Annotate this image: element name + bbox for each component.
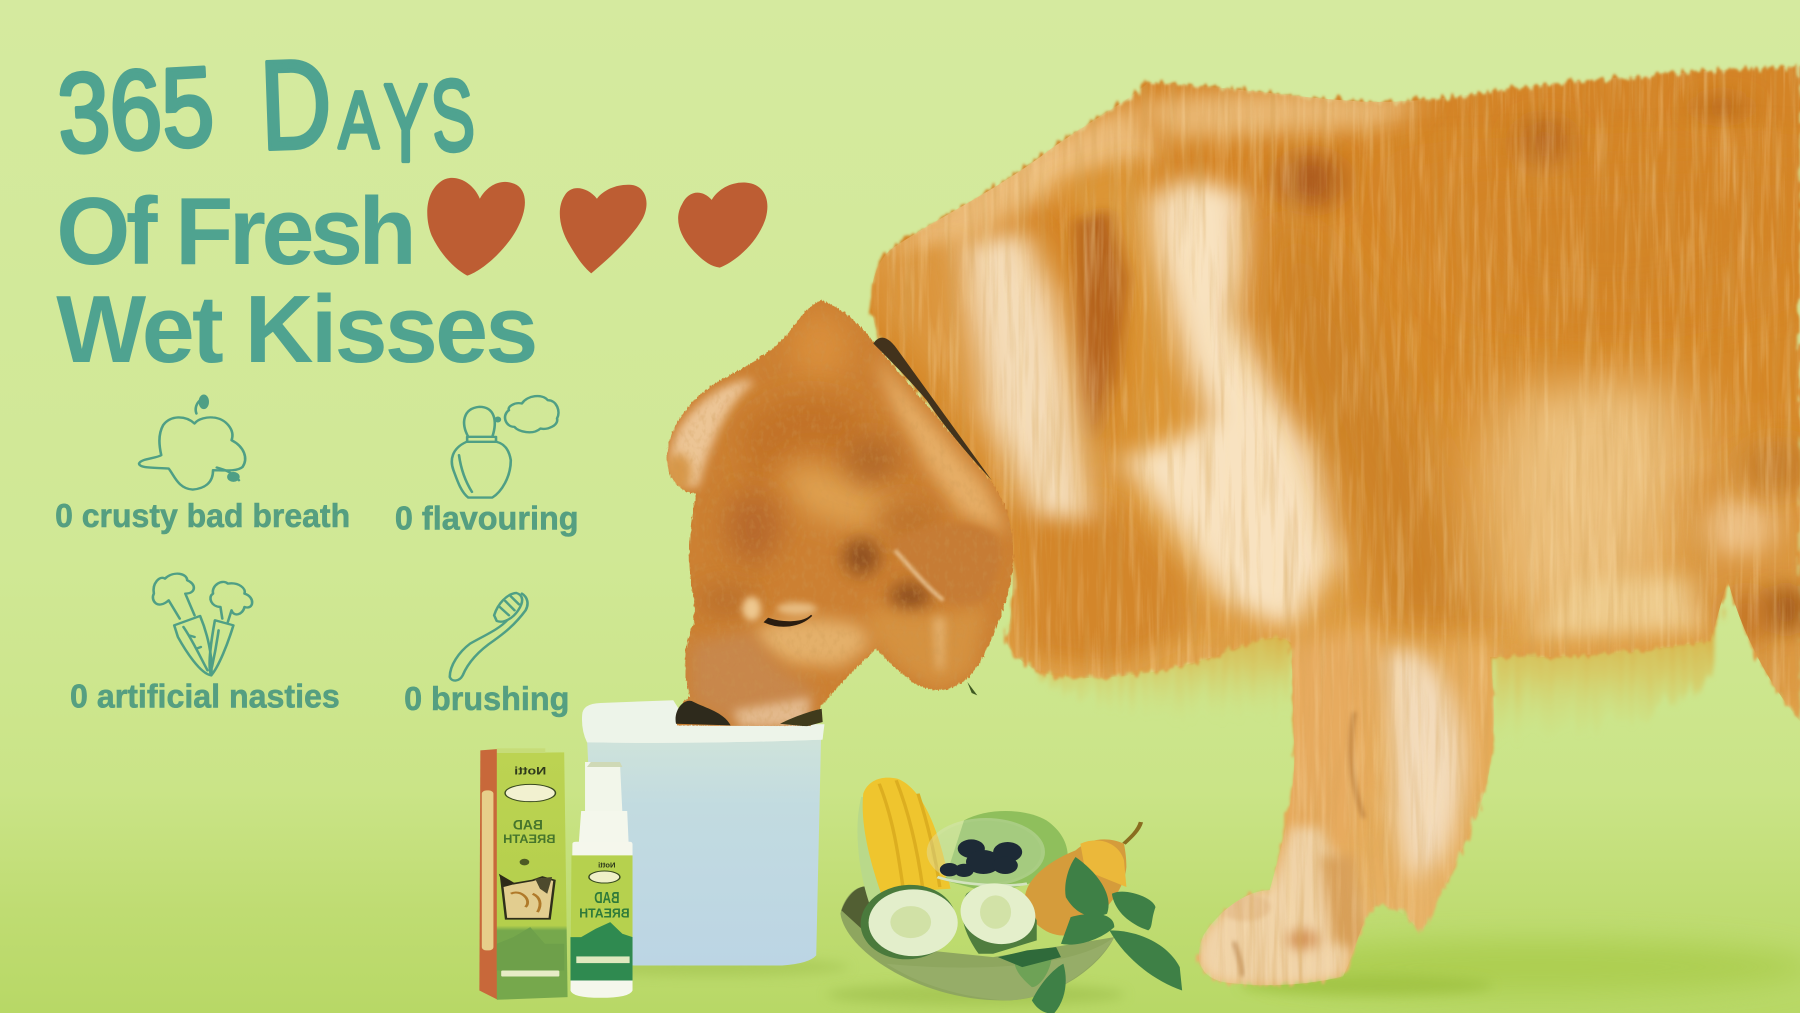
bottle name mirrored: BAD xyxy=(594,890,619,907)
bottle name mirrored xyxy=(579,890,630,921)
brow spot xyxy=(742,597,761,621)
mouth shade xyxy=(780,709,823,726)
title line: 365 Days: Y xyxy=(383,62,428,185)
chest lower orange xyxy=(1005,499,1189,667)
leg feather cream xyxy=(1383,648,1465,879)
bottle body xyxy=(570,842,633,998)
bottle label xyxy=(570,855,633,980)
dog head xyxy=(660,293,1020,734)
product name mirrored xyxy=(503,817,555,846)
icon: perfume bottle xyxy=(452,396,558,498)
bottle name mirrored: BREATH xyxy=(579,906,630,921)
leg feather orange xyxy=(1441,643,1498,821)
deep flank xyxy=(1269,213,1489,630)
label: artificial nasties: 0 artificial nasties xyxy=(70,678,340,715)
dog body xyxy=(849,57,1800,999)
dog xyxy=(660,57,1800,999)
muzzle xyxy=(690,630,813,725)
cucumber slice right xyxy=(962,886,1037,954)
corn husk xyxy=(857,797,896,910)
eye xyxy=(765,615,812,626)
belly fur fringe xyxy=(1016,609,1722,741)
title line: 365 Days: A xyxy=(339,76,379,166)
leg crease xyxy=(1351,712,1364,818)
apple xyxy=(945,811,1068,894)
ear flap xyxy=(916,527,992,585)
benefits labels xyxy=(55,498,579,718)
icon: apple breath cloud xyxy=(139,395,245,490)
title line: 365 Days xyxy=(54,33,478,185)
label: crusty bad breath: 0 crusty bad breath xyxy=(55,498,350,535)
box white strip xyxy=(501,970,559,976)
green tag xyxy=(967,682,977,695)
title xyxy=(54,33,538,383)
cheek xyxy=(753,619,870,667)
product name mirrored: BAD xyxy=(513,817,543,833)
ear base xyxy=(670,380,753,487)
dark patches xyxy=(727,490,780,564)
spray bottle xyxy=(570,762,633,998)
title line: Wet Kisses: Wet Kisses xyxy=(56,277,538,383)
box front xyxy=(497,752,568,1000)
title line: Of Fresh: Of Fresh xyxy=(56,179,417,285)
dark shoulder spots xyxy=(1281,152,1342,209)
product box xyxy=(479,748,568,1000)
title line: 365 Days: D xyxy=(258,33,334,176)
icon: toothbrush xyxy=(450,593,528,681)
pump xyxy=(585,762,622,812)
collar xyxy=(873,338,992,480)
title line: 365 Days: 365 xyxy=(54,43,217,177)
cucumber slice left xyxy=(852,880,965,965)
mint leaves xyxy=(998,857,1182,1013)
shoulder orange xyxy=(1049,152,1186,440)
box hill xyxy=(497,927,564,970)
bowl back xyxy=(840,886,1114,1001)
fur streak texture xyxy=(849,57,1800,999)
fountain front lip xyxy=(587,725,823,743)
neck ruff light xyxy=(873,354,1007,534)
pale lower flank xyxy=(1483,377,1697,614)
fruit bowl xyxy=(840,778,1182,1013)
front leg shading xyxy=(1268,626,1378,896)
brand oval xyxy=(505,784,555,802)
collar cap xyxy=(579,811,629,844)
floor shadow xyxy=(574,939,1800,1006)
jowl xyxy=(867,607,987,689)
blueberries xyxy=(940,839,1022,877)
corn xyxy=(863,778,950,895)
rear thigh xyxy=(1685,442,1800,703)
brow highlights xyxy=(780,467,913,534)
cream shoulder patch xyxy=(1122,177,1339,630)
fountain rim xyxy=(582,700,824,743)
icon: carrots xyxy=(153,574,252,675)
paw xyxy=(1199,827,1360,985)
box side xyxy=(479,749,498,1000)
brand Notti mirrored: Notti xyxy=(514,765,546,777)
forehead shades xyxy=(790,313,850,380)
glass dish xyxy=(929,819,1043,885)
fountain body xyxy=(587,737,821,965)
benefits icons xyxy=(139,395,558,681)
box top edge xyxy=(497,748,545,753)
hearts xyxy=(427,178,767,276)
nose xyxy=(676,701,731,725)
bottle brand mirrored: Notti xyxy=(598,861,616,869)
neck orange band xyxy=(872,236,986,436)
pear xyxy=(1025,839,1126,936)
label: brushing: 0 brushing xyxy=(404,681,569,718)
label: flavouring: 0 flavouring xyxy=(395,500,579,537)
cream neck patch xyxy=(962,230,1091,520)
top back fringe xyxy=(1134,90,1422,140)
box illustration pets xyxy=(499,859,554,919)
rust stripe xyxy=(1076,209,1128,446)
title line: 365 Days: S xyxy=(428,59,478,174)
water fountain xyxy=(582,700,824,965)
product name mirrored: BREATH xyxy=(503,833,555,846)
head fur texture xyxy=(674,310,1012,726)
